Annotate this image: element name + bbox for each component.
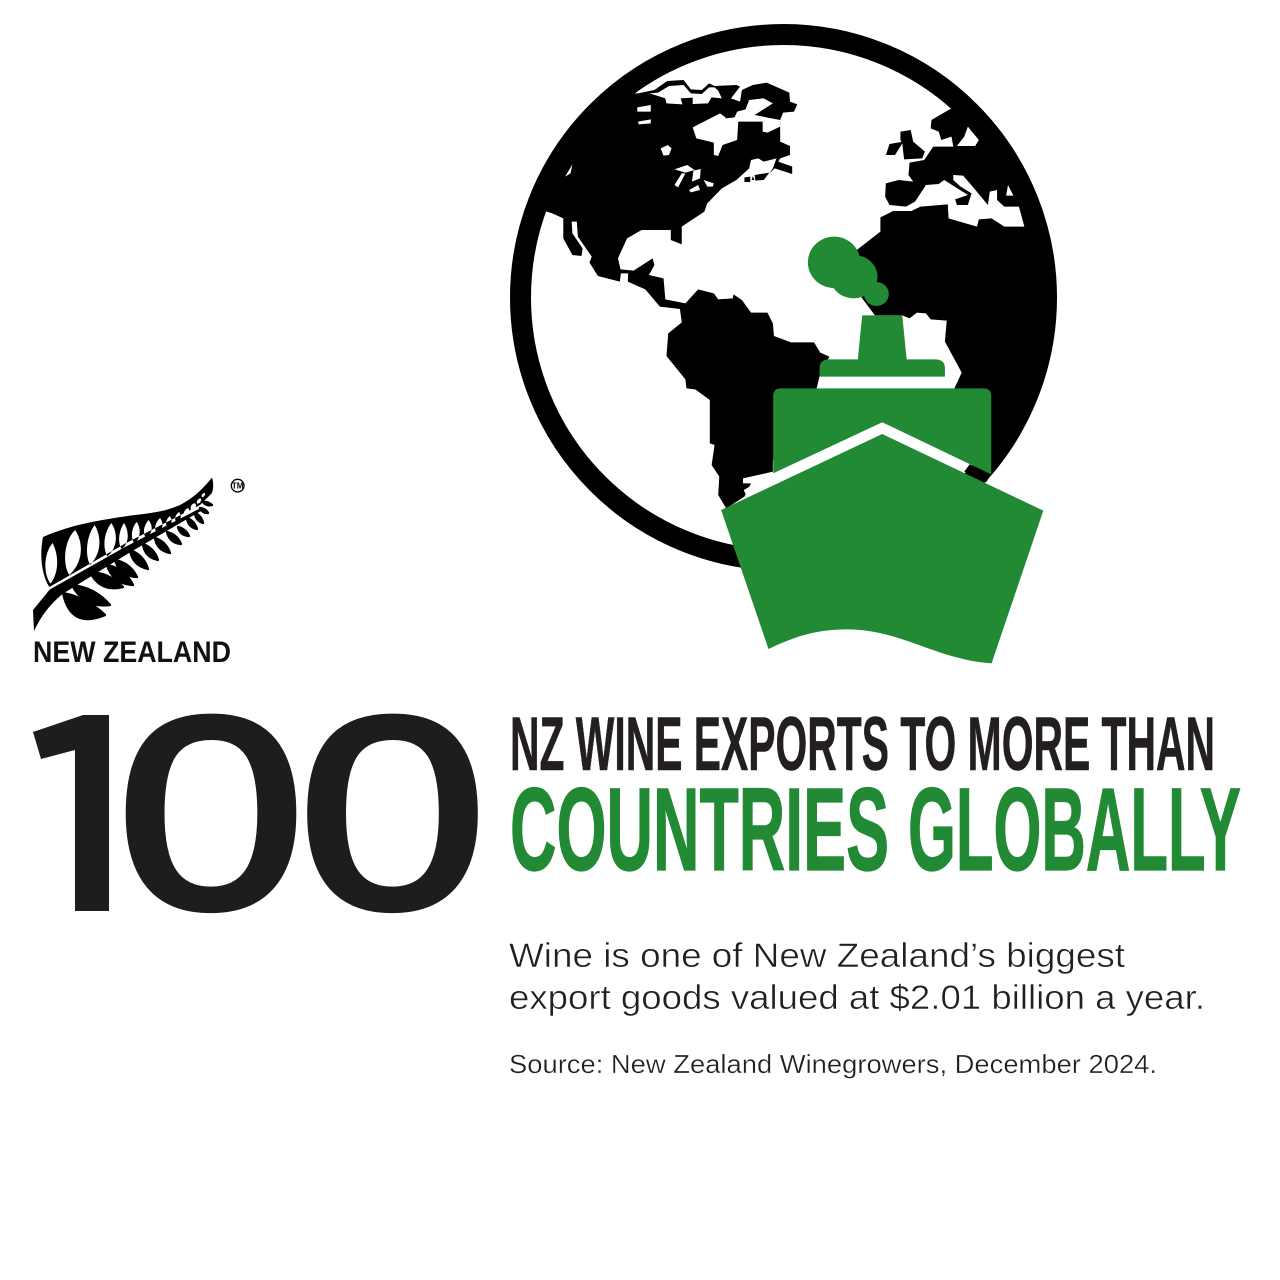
logo: New Zealand fern [33,478,244,669]
digit 1: 1 [33,657,167,971]
trademark symbol [231,479,244,492]
digit 0: 0 [298,662,487,965]
ship hull [721,434,1043,663]
icon: globe [510,24,1057,568]
logo wordmark: NEW ZEALAND [33,636,231,669]
fern leaflets [63,502,212,619]
ship smoke [808,237,889,306]
digit 1 [33,715,109,911]
source note: Source: New Zealand Winegrowers, December 2024. [509,1049,1157,1079]
body text [509,937,1205,1017]
ship white stripe [744,422,970,497]
fern upper frond [41,478,213,587]
land: the Americas [546,80,830,508]
globe ring [520,34,1046,560]
icon: ship [721,237,1043,663]
digit 0: 0 [117,662,305,965]
globe continents [546,80,1036,508]
land: Europe [885,108,1019,207]
body text: export goods valued at $2.01 billion a year. [509,979,1205,1017]
fern tip openings [182,492,206,518]
fern stem [33,508,203,631]
headline line 2: COUNTRIES [510,764,889,896]
land: Africa and Asia [857,204,1036,442]
big number 100 [33,714,478,914]
ship funnel and upper deck [820,315,945,377]
body text: Wine is one of New Zealand’s biggest [509,937,1126,975]
infographic canvas [33,24,1240,1078]
ship cabin [773,388,991,474]
ship dark stripe [964,464,991,482]
trademark symbol: TM [232,482,244,491]
